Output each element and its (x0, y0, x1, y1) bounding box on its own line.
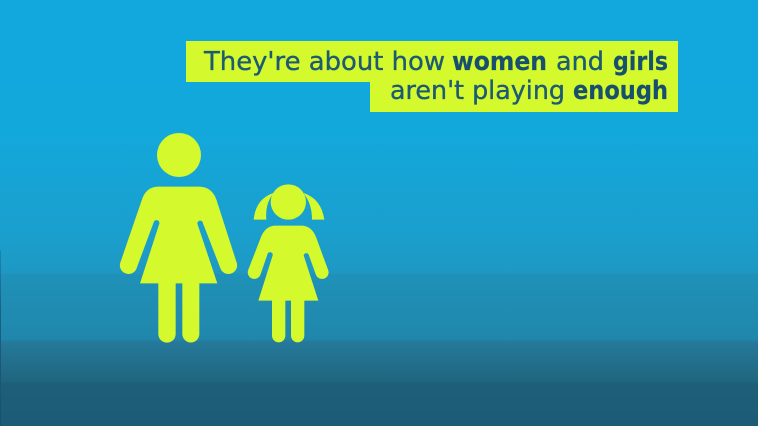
caption text line 1 (203, 47, 668, 77)
caption text line 1: They're about how (203, 47, 445, 77)
icon: girl (248, 184, 329, 342)
caption text line 1: girls (613, 47, 668, 77)
caption text line 1: women (452, 47, 547, 77)
icon: woman (120, 133, 237, 343)
caption text line 2 (390, 76, 668, 106)
banner background (186, 41, 678, 112)
caption text line 2: aren't playing (390, 76, 565, 106)
caption text line 2: enough (573, 76, 668, 106)
caption text line 1: and (556, 47, 604, 77)
caption banner (186, 41, 678, 112)
